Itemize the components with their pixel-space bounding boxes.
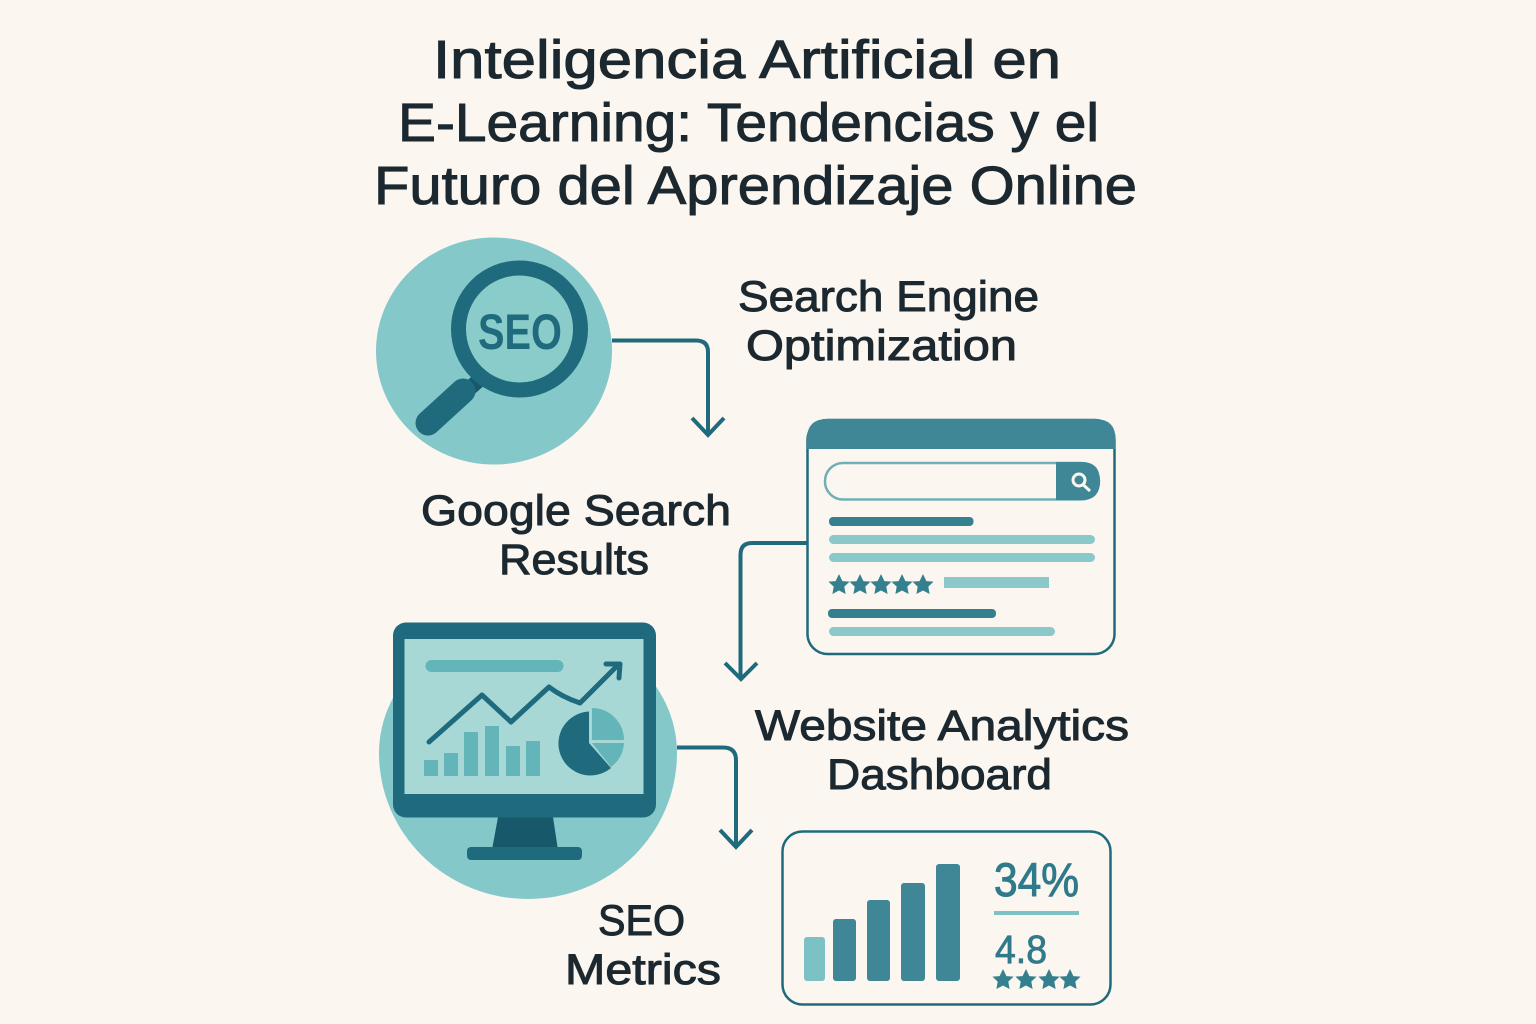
icon: analytics monitor (379, 622, 677, 899)
label: Search Engine Optimization (738, 273, 1039, 370)
title: Inteligencia Artificial en (433, 30, 1061, 90)
label: Website Analytics Dashboard: Website Analytics (755, 702, 1129, 750)
result lines (828, 517, 1095, 636)
arrow: analytics to metrics (677, 748, 752, 847)
metric divider (994, 911, 1079, 915)
title (374, 30, 1137, 216)
metric: 34%: 34% (994, 853, 1079, 906)
rating stars (828, 574, 934, 594)
label: Website Analytics Dashboard: Dashboard (827, 751, 1052, 799)
line chart (429, 664, 620, 742)
arrow: search results to analytics (725, 543, 807, 679)
label: Google Search Results (421, 487, 731, 584)
label: Google Search Results: Google Search (421, 487, 731, 535)
bar chart (424, 726, 540, 776)
metric stars (992, 969, 1081, 989)
label: SEO Metrics: SEO (598, 897, 685, 945)
browser header (807, 419, 1116, 449)
title: E-Learning: Tendencias y el (398, 93, 1099, 153)
title: Futuro del Aprendizaje Online (374, 156, 1137, 216)
metric: 4.8: 4.8 (995, 928, 1047, 972)
label: Search Engine Optimization: Search Engine (738, 273, 1039, 321)
label: Search Engine Optimization: Optimization (746, 322, 1017, 370)
panel: search results browser (807, 419, 1116, 654)
pie chart (558, 708, 624, 775)
label: Google Search Results: Results (499, 536, 649, 584)
label: SEO Metrics: Metrics (565, 946, 721, 994)
arrow: SEO to search results (612, 340, 724, 435)
label: Website Analytics Dashboard (755, 702, 1129, 799)
icon: SEO magnifying glass: SEO (478, 304, 562, 360)
label: SEO Metrics (565, 897, 721, 994)
panel: SEO metrics card (782, 832, 1110, 1004)
metrics bar chart (804, 864, 960, 981)
icon: SEO magnifying glass (376, 238, 612, 464)
search bar (825, 462, 1100, 500)
